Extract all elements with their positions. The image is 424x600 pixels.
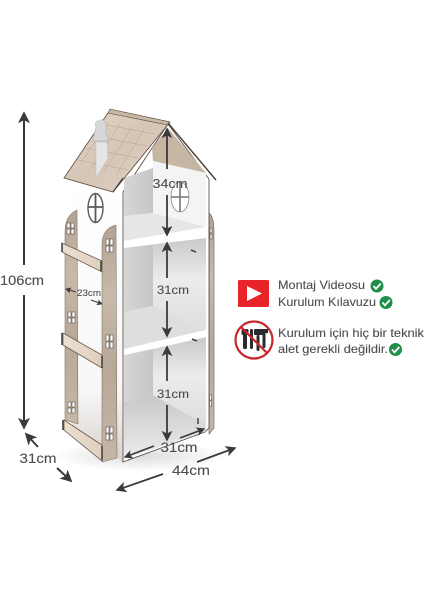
shelf 1 [124, 213, 206, 248]
middle right wall [153, 238, 206, 330]
icon: check tools [389, 343, 402, 356]
chimney [93, 120, 108, 178]
lower right wall [153, 337, 206, 425]
dimension: inner width 31cm [125, 429, 204, 457]
side window [88, 193, 103, 223]
dimension: lower compartment 31cm: 31cm [157, 387, 189, 401]
dimension: side 23cm: 23cm [77, 288, 101, 299]
upper back wall [124, 168, 153, 216]
text: installation guide: Kurulum Kılavuzu [278, 295, 376, 309]
icon: check video [370, 280, 384, 292]
interior roof underside [152, 128, 206, 173]
right side wood panel [209, 213, 214, 434]
icon: no tools [236, 322, 272, 358]
dollhouse bookshelf [62, 109, 216, 462]
text: no tools line one: Kurulum için hiç bir teknik [278, 326, 424, 340]
shelf 2 [124, 306, 206, 355]
upper right wall [153, 161, 206, 227]
middle back wall [124, 244, 153, 312]
icon: video play [238, 280, 269, 307]
dimension: top compartment 34cm: 34cm [152, 176, 188, 191]
text: no tools line two: alet gerekli değildir. [278, 342, 388, 356]
text: assembly video: Montaj Videosu [278, 278, 365, 292]
dimension: width 44cm: 44cm [172, 462, 210, 478]
roof shingle lines [78, 122, 155, 175]
icon: check guide [380, 296, 392, 309]
dimension: middle compartment 31cm [157, 243, 189, 336]
left wood column [65, 210, 78, 424]
dimension: middle compartment 31cm: 31cm [157, 283, 189, 297]
round window right wall [171, 182, 189, 212]
dimension: inner width 31cm: 31cm [160, 439, 198, 455]
dimension: lower compartment 31cm [157, 347, 189, 440]
side bands [62, 243, 102, 461]
right wood column [102, 225, 117, 462]
floor shadow [52, 441, 228, 471]
dimension: total height 106cm: 106cm [0, 272, 44, 288]
front frame white panel [123, 124, 209, 462]
roof [64, 109, 216, 192]
dimension: top compartment 34cm [152, 129, 188, 235]
shelf fixings [191, 250, 198, 424]
small windows on side columns [67, 223, 212, 440]
dimension: depth 31cm: 31cm [20, 450, 56, 466]
dimension: side 23cm [66, 288, 102, 304]
dimension: width 44cm [117, 448, 235, 490]
left side white wall [72, 181, 123, 462]
lower back wall [124, 349, 153, 402]
dimension: depth 31cm [20, 434, 71, 481]
floor [124, 395, 206, 459]
